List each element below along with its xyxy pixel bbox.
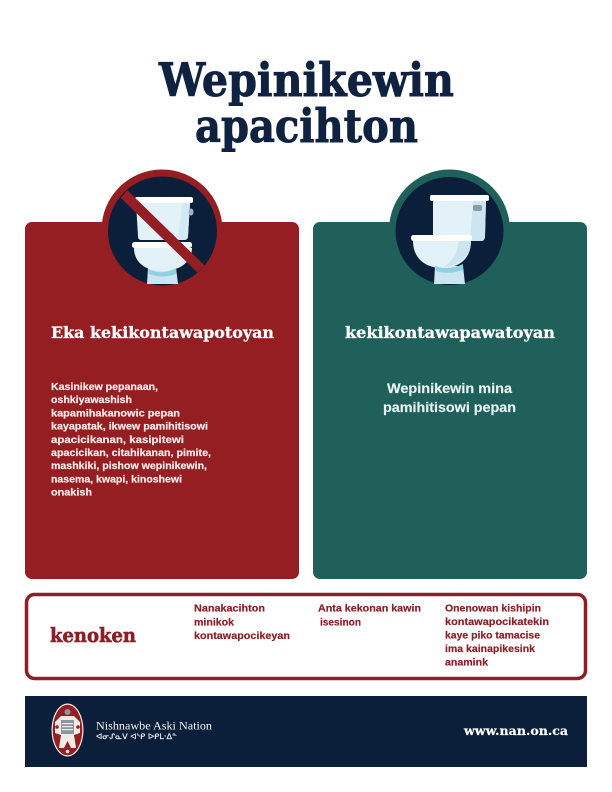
text block: do not flush list: onakish [51,487,92,499]
text block: column one: kontawapocikeyan [194,630,290,642]
text block: column three: anamink [445,656,488,668]
title: Wepinikewin [158,53,454,107]
text block: column two [318,602,421,628]
text block: flush list: Wepinikewin mina [387,381,513,396]
heading: flush: kekikontawapawatoyan [345,323,555,342]
website url: www.nan.on.ca [463,723,568,738]
icon: toilet [396,177,504,285]
text block: do not flush list: apacicikan, citahikanan, pimite, [51,447,211,459]
text block: column three: kontawapocikatekin [445,616,549,628]
heading: do not flush: Eka kekikontawapotoyan [51,323,274,342]
title [158,53,454,153]
text block: do not flush list: apacicikanan, kasipitewi [51,434,184,446]
text block: column three: Onenowan kishipin [445,602,541,614]
text block: do not flush list: kayapatak, ikwew pamihitisowi [51,421,208,433]
heading: kenoken: kenoken [50,623,136,647]
logo wordmark [96,718,212,741]
text block: column one: Nanakacihton [194,602,265,614]
text block: do not flush list [51,381,211,499]
text block: column two: Anta kekonan kawin [318,602,421,614]
title: apacihton [195,99,418,153]
text block: do not flush list: mashkiki, pishow wepinikewin, [51,460,207,472]
text block: do not flush list: Kasinikew pepanaan, [51,381,158,393]
text block: column three [445,602,549,668]
text block: column one [194,602,290,642]
text block: column three: ima kainapikesink [445,643,535,655]
text block: do not flush list: nasema, kwapi, kinoshewi [51,473,182,485]
text block: column two: isesinon [320,616,361,628]
icon: Nishnawbe Aski Nation logo [52,704,84,756]
text block: column three: kaye piko tamacise [445,630,540,642]
text block: column one: minikok [194,616,234,628]
text block: flush list: pamihitisowi pepan [383,400,516,415]
footer banner [25,696,587,767]
logo wordmark: Nishnawbe Aski Nation [96,718,212,732]
panel: kenoken callout [26,594,586,678]
icon: crossed-out toilet [108,176,217,286]
logo wordmark: ᐊᓂᔑᓇᐯ ᐊᔅᑭ ᐅᑭᒪ·ᐃᓐ [96,732,178,741]
panel: do not flush [25,170,299,579]
text block: do not flush list: oshkiyawashish [51,394,132,406]
text block: flush list [383,381,516,415]
panel: flush [313,170,587,579]
text block: do not flush list: kapamihakanowic pepan [51,407,180,419]
